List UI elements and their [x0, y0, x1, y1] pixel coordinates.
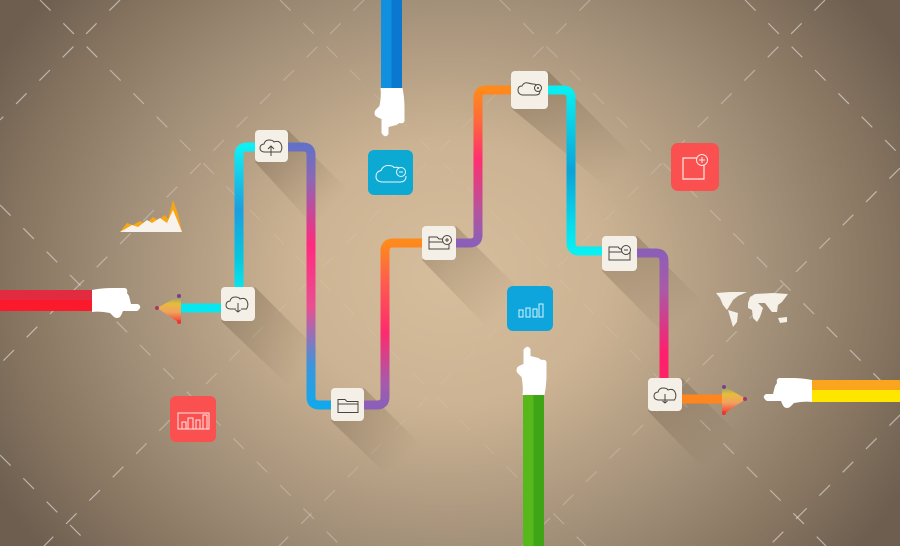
arrowhead: right	[722, 385, 747, 415]
pipe: folder minus to cloud download	[634, 253, 664, 380]
right hand	[764, 378, 812, 408]
node: folder plus	[422, 226, 456, 260]
top arm: blue sleeve	[381, 0, 402, 88]
node: cloud settings	[511, 71, 548, 109]
node: cloud download left	[221, 287, 255, 321]
pipe: cloud settings to folder minus	[545, 90, 605, 251]
node: folder minus	[602, 236, 637, 271]
pipe: cloud upload to folder	[285, 147, 335, 405]
bottom arm: green sleeve	[523, 395, 544, 546]
left hand	[92, 288, 140, 318]
arrowhead: left	[155, 294, 181, 324]
bottom hand	[516, 347, 546, 395]
arrow tail: left cyan pipe	[181, 304, 222, 312]
icon: world map	[716, 292, 788, 327]
tile: red square plus	[671, 143, 719, 191]
pipe: cloud download to cloud upload	[239, 147, 258, 290]
node: folder	[331, 388, 364, 421]
right arm: yellow sleeve	[812, 380, 900, 402]
arrow tail: right orange pipe	[680, 394, 723, 404]
left arm: red sleeve	[0, 290, 92, 311]
pipe: folder plus to cloud settings	[453, 90, 514, 243]
node: cloud upload	[255, 130, 288, 162]
pipe: folder to folder plus	[360, 243, 425, 405]
tile: red bar chart	[170, 396, 216, 442]
tile: blue bar chart	[507, 286, 553, 331]
top hand	[374, 88, 404, 136]
long shadows of nodes	[221, 71, 735, 470]
node: cloud download right	[648, 378, 682, 411]
tile: blue cloud minus	[368, 150, 413, 195]
icon: mountain area chart	[120, 200, 182, 232]
